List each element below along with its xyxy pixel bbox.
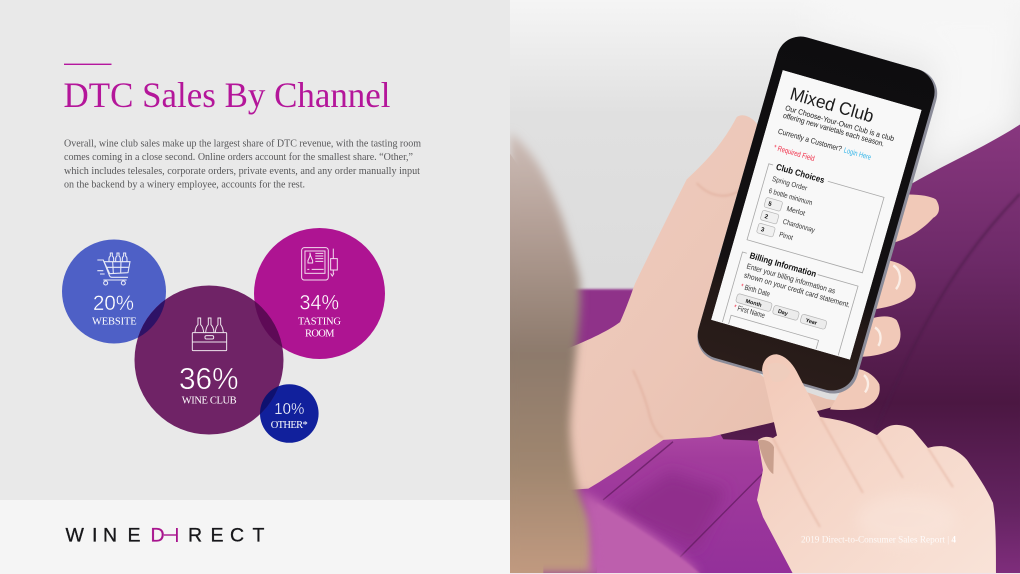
fieldset: club choices: Pinot [778,230,794,242]
label: wine club: WINE CLUB [182,396,237,406]
fieldset: club choices: Merlot [786,204,806,218]
intro paragraph: on the backend by a winery employee, accounts for the rest. [64,178,305,190]
thumb nail [758,440,774,474]
logo mark: magenta D and I [150,525,178,547]
fingernail highlights [864,265,900,392]
fieldset: club choices: Spring Order [771,174,809,193]
bubble: website [62,240,166,344]
label: website: WEBSITE [92,316,137,328]
fieldset: club choices: Chardonnay [782,217,816,235]
screen intro text: Login Here [843,145,872,162]
logo: WineDirect [66,525,264,547]
hair base [510,154,543,574]
intro paragraph: which includes telesales, corporate orders, private events, and any order manually input [64,165,420,177]
screen intro text [774,106,894,161]
label: other: OTHER* [271,420,308,431]
fieldset: billing information: shown on your credit card statement. [743,271,851,309]
label: tasting room: ROOM [305,328,335,340]
fieldset: club choices: Club Choices [775,162,826,185]
fieldset: club choices: 3 [760,227,765,234]
overlap: other and wine club [260,386,279,414]
fieldset: billing information: Billing Information [749,250,818,279]
finger outlines [773,417,953,527]
icon: shopping cart with bottles [97,253,130,285]
value: website percent: 20% [93,291,134,315]
left hand [560,115,850,490]
panel: left background [0,0,510,500]
finger nail [767,363,790,382]
palm crease [633,183,740,438]
overlap: website and wine club [138,300,166,338]
lap seams [603,442,763,557]
photo background sofa [510,0,1020,400]
hand highlight [872,513,880,520]
logo: WineDirect: W [66,525,84,547]
overlap: tasting room and wine club [254,301,282,348]
bubble: wine club [134,286,284,434]
phone screen [711,70,922,360]
bubble: tasting room [254,228,385,359]
photo: hand holding phone [510,0,1020,574]
screen heading: Mixed Club [788,83,876,126]
title rule [64,64,112,65]
logo: WineDirect: E [128,525,141,547]
shoulder edge [660,544,700,573]
logo: WineDirect: C [230,525,244,547]
lap shading [622,474,721,544]
intro paragraph [64,137,422,190]
screen intro text: offering new varietals each season. [782,111,885,148]
panel: footer band [0,500,510,574]
logo: WineDirect: R [188,525,202,547]
fieldset: club choices [747,159,885,273]
intro paragraph: Overall, wine club sales make up the largest share of DTC revenue, with the tasting room [64,137,422,149]
logo: WineDirect: T [252,525,264,547]
shoulder base [597,570,604,573]
right hand [757,354,996,574]
bright wall glow [920,35,1020,172]
value: tasting room percent: 34% [300,292,339,314]
fieldset: billing information: Year [805,318,818,327]
fieldset: club choices: 6 bottle minimum [768,186,813,207]
fieldset: billing information: * Birth Date [740,282,771,299]
blurred hair [510,133,597,574]
fieldset: billing information: * First Name [733,303,766,320]
fieldset: billing information [722,248,859,355]
wall gap between thumb and phone [718,249,722,257]
logo mark: magenta D and I: D [150,525,165,547]
value: other percent: 10% [274,401,305,418]
fieldset: billing information: Day [777,309,789,318]
cushion seam [924,194,1020,328]
logo: WineDirect: N [103,525,117,547]
label: tasting room: TASTING [298,316,341,328]
purple lap [543,434,792,573]
icon: wine crate [192,318,227,351]
logo: WineDirect: I [92,525,97,547]
value: wine club percent: 36% [179,362,238,396]
fieldset: billing information: Enter your billing information as [746,262,837,296]
intro paragraph: comes coming in a close second. Online orders account for the smallest share. “Other,” [64,151,413,163]
fieldset: billing information: Month [745,299,763,309]
label: tasting room [298,316,341,340]
title: DTC Sales By Channel [64,75,390,115]
fieldset: club choices: 2 [764,214,769,221]
phone bezel [692,31,940,396]
screen intro text: * Required Field [773,143,816,163]
bubble: other [260,384,319,443]
bubble chart [62,228,385,443]
logo: WineDirect: E [210,525,224,547]
purple cushion right [710,124,1020,574]
purple behind wrist [570,287,634,347]
shoulder [582,490,701,573]
icon: tablet with bottle [302,248,337,280]
page footer text: 2019 Direct-to-Consumer Sales Report | 4 [801,534,956,546]
screen intro text: Our Choose-Your-Own Club is a club [784,103,895,143]
screen intro text: Currently a Customer? [777,127,843,153]
fingers behind phone [830,195,939,410]
phone body [691,31,943,399]
phone [691,31,943,399]
fieldset: club choices: 5 [767,201,773,208]
